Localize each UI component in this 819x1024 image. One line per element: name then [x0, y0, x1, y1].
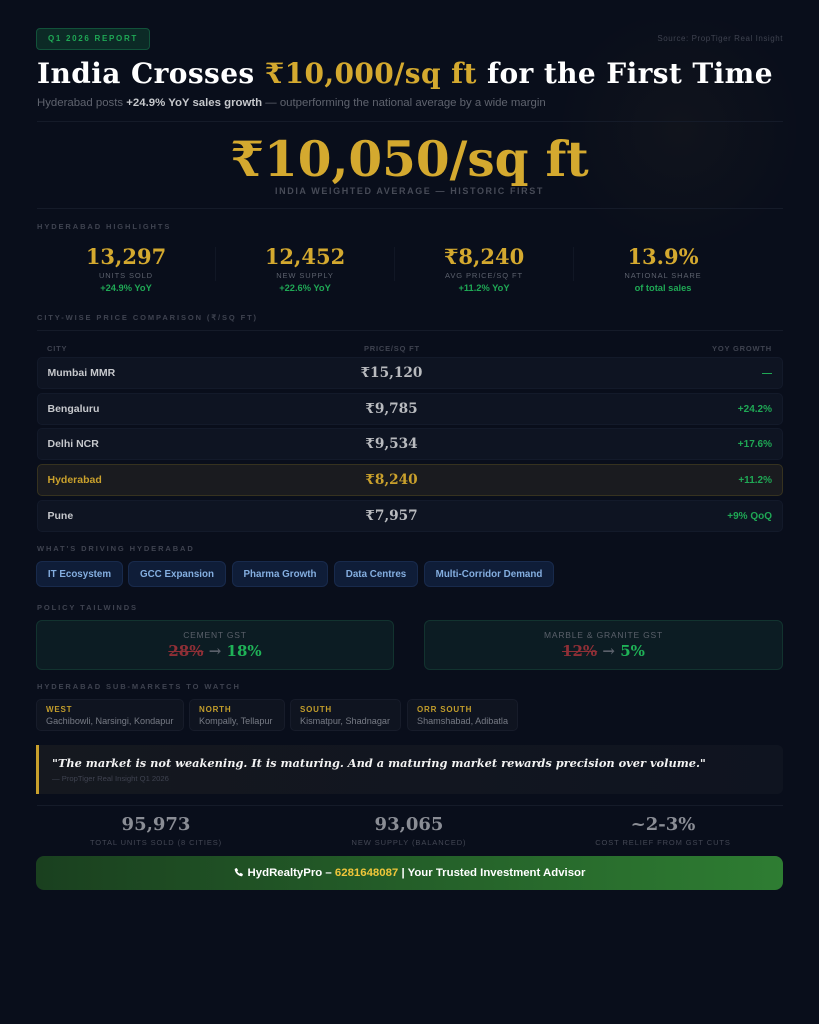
row: Hyderabad highlighted: ₹8,240: [365, 472, 418, 488]
heading: highlights: HYDERABAD HIGHLIGHTS: [37, 222, 171, 231]
total: relief: [595, 814, 731, 847]
row: Delhi: ₹9,534: [365, 436, 418, 452]
row: Mumbai: ₹15,120: [361, 364, 422, 380]
badge: report period: [36, 28, 150, 50]
chip: [232, 561, 328, 587]
row: Bengaluru: [36, 393, 783, 425]
chip: IT Ecosystem: [48, 569, 111, 580]
row: Delhi: +17.6%: [738, 438, 772, 450]
row: Delhi: [36, 428, 783, 460]
heading: city comparison: CITY-WISE PRICE COMPARISON (₹/SQ FT): [37, 313, 258, 322]
heading: sub-markets: HYDERABAD SUB-MARKETS TO WATCH: [37, 682, 241, 691]
card: cement GST: CEMENT GST: [183, 630, 247, 640]
total: relief: ~2-3%: [631, 814, 695, 835]
row: Pune: +9% QoQ: [727, 510, 772, 522]
chip: Pharma Growth: [244, 569, 316, 580]
stat: national share: of total sales: [635, 283, 691, 293]
row: Pune: Pune: [48, 510, 73, 522]
quote attribution: — PropTiger Real Insight Q1 2026: [52, 774, 169, 783]
badge: report period: Q1 2026 REPORT: [48, 34, 138, 43]
background glow: [540, 20, 819, 240]
row: Hyderabad highlighted: [36, 464, 783, 496]
heading: drivers: WHAT'S DRIVING HYDERABAD: [37, 544, 195, 553]
table header: [47, 344, 772, 353]
row: Hyderabad highlighted: Hyderabad: [48, 474, 102, 486]
total: supply: NEW SUPPLY (BALANCED): [352, 838, 466, 847]
table: city price comparison: [37, 344, 783, 532]
card: South: [290, 699, 401, 731]
card: North: [189, 699, 285, 731]
stat: units sold: [86, 244, 166, 293]
quote: [36, 745, 783, 794]
card: South: SOUTH: [300, 705, 332, 714]
row: Mumbai: Mumbai MMR: [48, 367, 115, 379]
card: marble GST: MARBLE & GRANITE GST: [544, 630, 663, 640]
row: Bengaluru: Bengaluru: [48, 403, 99, 415]
row: Delhi: Delhi NCR: [48, 438, 99, 450]
stat: average price: AVG PRICE/SQ FT: [445, 271, 523, 280]
stat: new supply: NEW SUPPLY: [276, 271, 334, 280]
panel: Hyderabad highlights: [86, 244, 702, 293]
stat: new supply: 12,452: [265, 244, 345, 269]
chip: GCC Expansion: [140, 569, 214, 580]
card: ORR South: ORR SOUTH: [417, 705, 472, 714]
chip: [128, 561, 226, 587]
total: units: TOTAL UNITS SOLD (8 CITIES): [90, 838, 222, 847]
card: ORR South: [407, 699, 518, 731]
card: West: [36, 699, 184, 731]
row: Mumbai: [36, 357, 783, 389]
total: supply: 93,065: [375, 814, 443, 835]
chip: [334, 561, 418, 587]
stat: units sold: UNITS SOLD: [99, 271, 153, 280]
card: West: WEST: [46, 705, 72, 714]
call to action banner: [36, 856, 783, 890]
stat: average price: ₹8,240: [444, 244, 524, 269]
card: North: NORTH: [199, 705, 231, 714]
table header: PRICE/SQ FT: [364, 344, 420, 353]
row: Hyderabad highlighted: +11.2%: [738, 474, 772, 486]
stat: national share: 13.9%: [627, 244, 699, 269]
row: Bengaluru: ₹9,785: [365, 400, 418, 416]
table header: YOY GROWTH: [712, 344, 772, 353]
total: units: 95,973: [122, 814, 190, 835]
chip: [424, 561, 554, 587]
subtitle: Hyderabad posts +24.9% YoY sales growth — outperforming the national average by a wide margin: [37, 97, 546, 109]
stat: units sold: 13,297: [86, 244, 166, 269]
chip: [36, 561, 123, 587]
table header: CITY: [47, 344, 67, 353]
chips: growth drivers: [36, 561, 554, 587]
stat: national share: [624, 244, 702, 293]
card: marble GST: 12% → 5%: [562, 642, 645, 660]
stat: new supply: +22.6% YoY: [279, 283, 331, 293]
stat: national share: NATIONAL SHARE: [624, 271, 702, 280]
card: South: Kismatpur, Shadnagar: [300, 716, 390, 726]
title: India Crosses ₹10,000/sq ft for the First Time: [37, 57, 773, 90]
call to action banner: HydRealtyPro – 6281648087 | Your Trusted Investment Advisor: [248, 867, 585, 879]
card: cement GST: 28% → 18%: [168, 642, 262, 660]
total: relief: COST RELIEF FROM GST CUTS: [595, 838, 731, 847]
stat: average price: [444, 244, 524, 293]
row: Bengaluru: +24.2%: [738, 404, 772, 414]
chip: Multi-Corridor Demand: [436, 569, 542, 580]
hero caption: INDIA WEIGHTED AVERAGE — HISTORIC FIRST: [275, 186, 544, 196]
hero price: ₹10,050/sq ft: [230, 131, 589, 188]
stat: units sold: +24.9% YoY: [100, 283, 152, 293]
total: units: [90, 814, 222, 847]
card: ORR South: Shamshabad, Adibatla: [417, 716, 508, 726]
stat: average price: +11.2% YoY: [458, 283, 510, 293]
heading: policy: POLICY TAILWINDS: [37, 603, 138, 612]
row: Mumbai: —: [762, 368, 772, 378]
quote text: "The market is not weakening. It is maturing. And a maturing market rewards precision over volume.": [52, 756, 706, 770]
card: North: Kompally, Tellapur: [199, 716, 272, 726]
card: West: Gachibowli, Narsingi, Kondapur: [46, 716, 173, 726]
card: marble GST: [424, 620, 783, 670]
card: cement GST: [36, 620, 394, 670]
total: supply: [352, 814, 466, 847]
row: Pune: ₹7,957: [365, 508, 418, 524]
chip: Data Centres: [346, 569, 406, 580]
row: Pune: [36, 500, 783, 532]
stat: new supply: [265, 244, 345, 293]
source note: Source: PropTiger Real Insight: [657, 34, 783, 43]
